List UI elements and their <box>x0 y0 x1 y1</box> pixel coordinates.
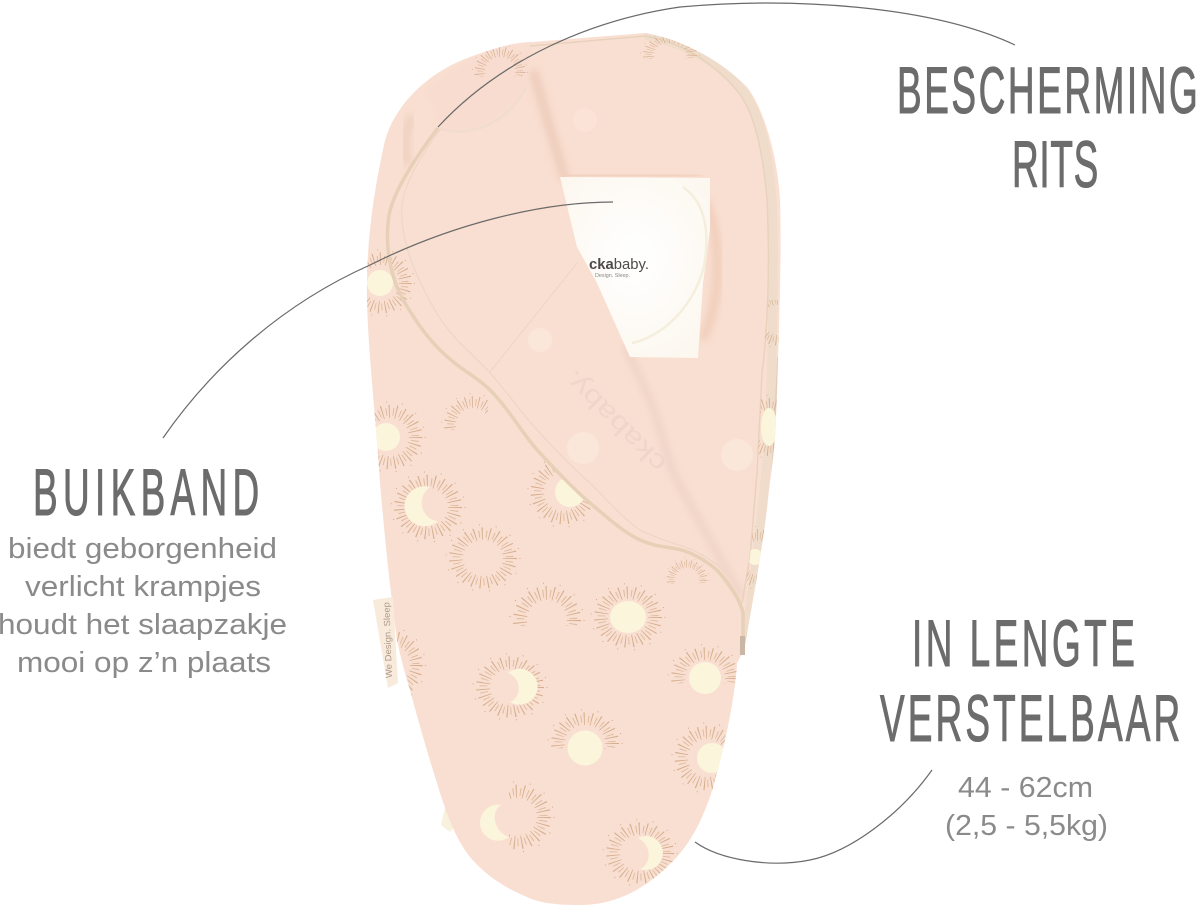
text block: size range: 44 - 62cm <box>958 772 1093 804</box>
text block: size range <box>945 772 1108 842</box>
pad tagline: Design. Sleep. <box>595 273 630 279</box>
pad edge peeking out at lower left <box>441 803 456 832</box>
text block: buikband benefits: houdt het slaapzakje <box>0 609 287 641</box>
leader line: in lengte verstelbaar <box>695 770 932 863</box>
heading: buikband: BUIKBAND <box>33 457 259 530</box>
heading: in lengte verstelbaar: IN LENGTE <box>912 608 1135 681</box>
belly band pad <box>560 177 710 358</box>
heading: bescherming rits: BESCHERMING <box>897 55 1198 128</box>
leader line: buikband <box>163 202 613 438</box>
text block: buikband benefits <box>0 533 287 679</box>
garment folds and shading <box>405 50 753 597</box>
heading: bescherming rits: RITS <box>1012 129 1098 202</box>
leader line: bescherming rits <box>438 3 1015 127</box>
embroidered logo: ckababy. <box>558 364 672 479</box>
garment label tag <box>373 597 398 688</box>
text block: buikband benefits: biedt geborgenheid <box>8 533 277 565</box>
sun and moon print <box>348 33 806 886</box>
heading: in lengte verstelbaar <box>880 608 1180 756</box>
text block: buikband benefits: mooi op z’n plaats <box>17 647 271 679</box>
flap seam <box>490 262 578 372</box>
tag text: We Design. Sleep <box>381 602 394 678</box>
flap zipper band <box>387 128 743 640</box>
text block: size range: (2,5 - 5,5kg) <box>945 810 1108 842</box>
neckline trim <box>438 88 526 131</box>
heading: in lengte verstelbaar: VERSTELBAAR <box>880 683 1180 756</box>
text block: buikband benefits: verlicht krampjes <box>25 571 261 603</box>
garment silhouette <box>367 33 781 905</box>
heading: bescherming rits <box>897 55 1198 202</box>
product: sleeping bag <box>348 33 806 905</box>
pad logo: ckababy. <box>589 257 649 273</box>
zipper pull <box>740 636 745 655</box>
zipper trim on back panel <box>530 35 778 653</box>
